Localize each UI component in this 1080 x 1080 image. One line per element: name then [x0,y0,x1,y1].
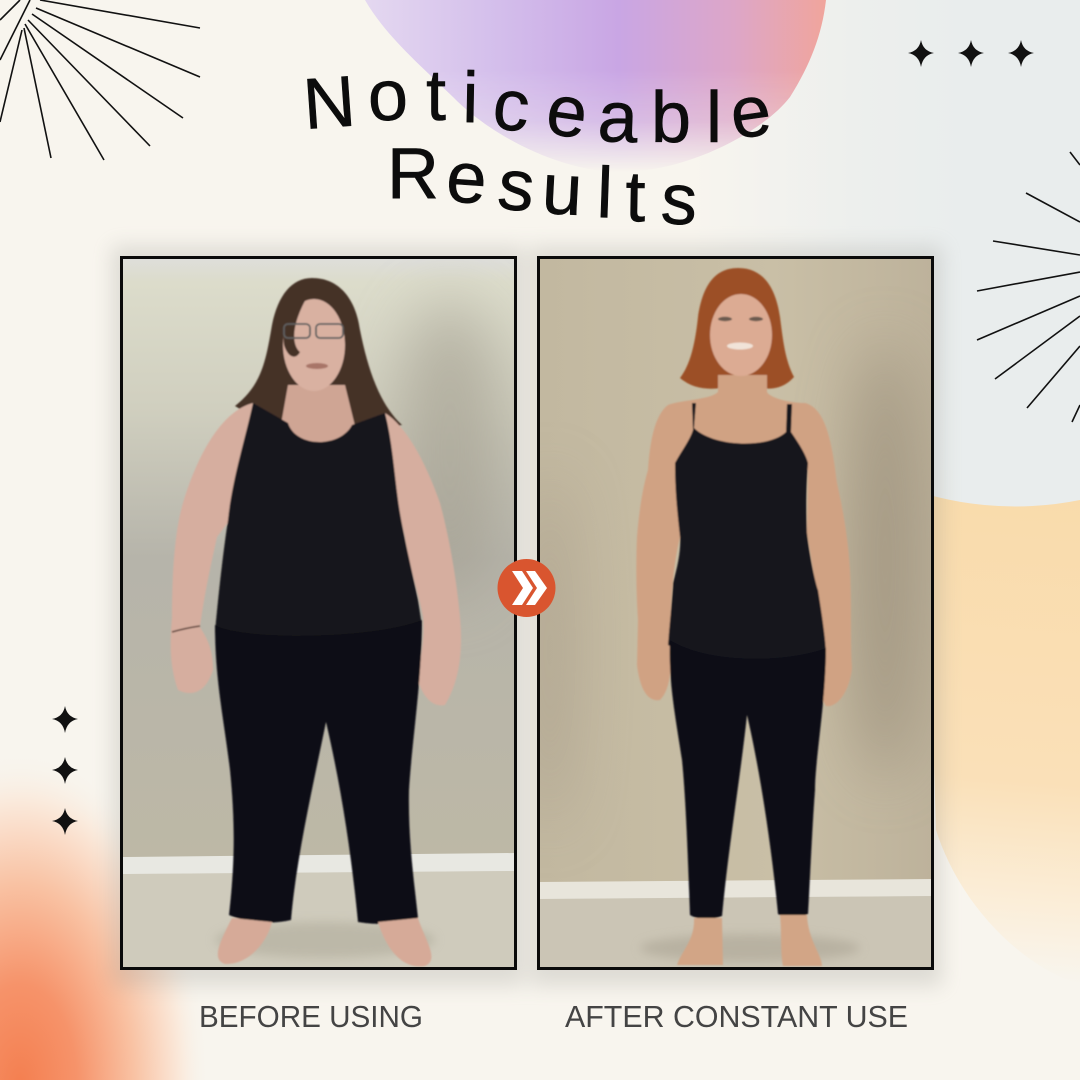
hair [680,268,794,389]
pants [215,620,422,924]
label: before: BEFORE USING [199,999,423,1034]
baseboard [122,853,515,874]
frame [122,258,516,968]
blob: orange bottom left [0,750,210,1080]
hair strands [282,300,306,358]
lips [306,363,328,369]
face [710,294,772,376]
pants [670,640,826,919]
blob: grey top right [688,0,1080,506]
frame [538,258,932,968]
neck and chest [280,385,356,450]
carpet [539,896,932,968]
blob: peach right [925,470,1080,985]
person: after [636,268,852,966]
icon: arrow badge [498,559,556,617]
eyes [718,317,763,321]
arms, neck and chest [636,375,852,706]
label: after: AFTER CONSTANT USE [565,999,908,1034]
hair back [235,278,402,440]
wall [122,258,515,858]
icons: sparkles left [52,706,78,835]
carpet [122,871,515,968]
glasses [284,324,343,338]
tank top [668,403,826,662]
bracelet [172,626,200,632]
feet [218,918,431,966]
person: before [171,278,461,966]
panel shadows [112,246,942,986]
title line 2: Results [387,134,699,241]
icons: sparkles top right [908,40,1034,67]
panel: before photo [122,258,516,968]
wall [539,258,932,888]
baseboard [539,879,932,899]
sunburst: right [977,152,1080,422]
tank top [215,403,422,658]
feet [677,915,822,966]
right arm [385,413,461,705]
sunburst: top left [0,0,200,160]
smile [727,342,753,350]
panel: after photo [532,258,932,968]
title [301,55,776,241]
left arm [171,403,262,693]
face [283,299,345,391]
blob: purple top [365,0,826,172]
title line 1: Noticeable [301,55,776,158]
